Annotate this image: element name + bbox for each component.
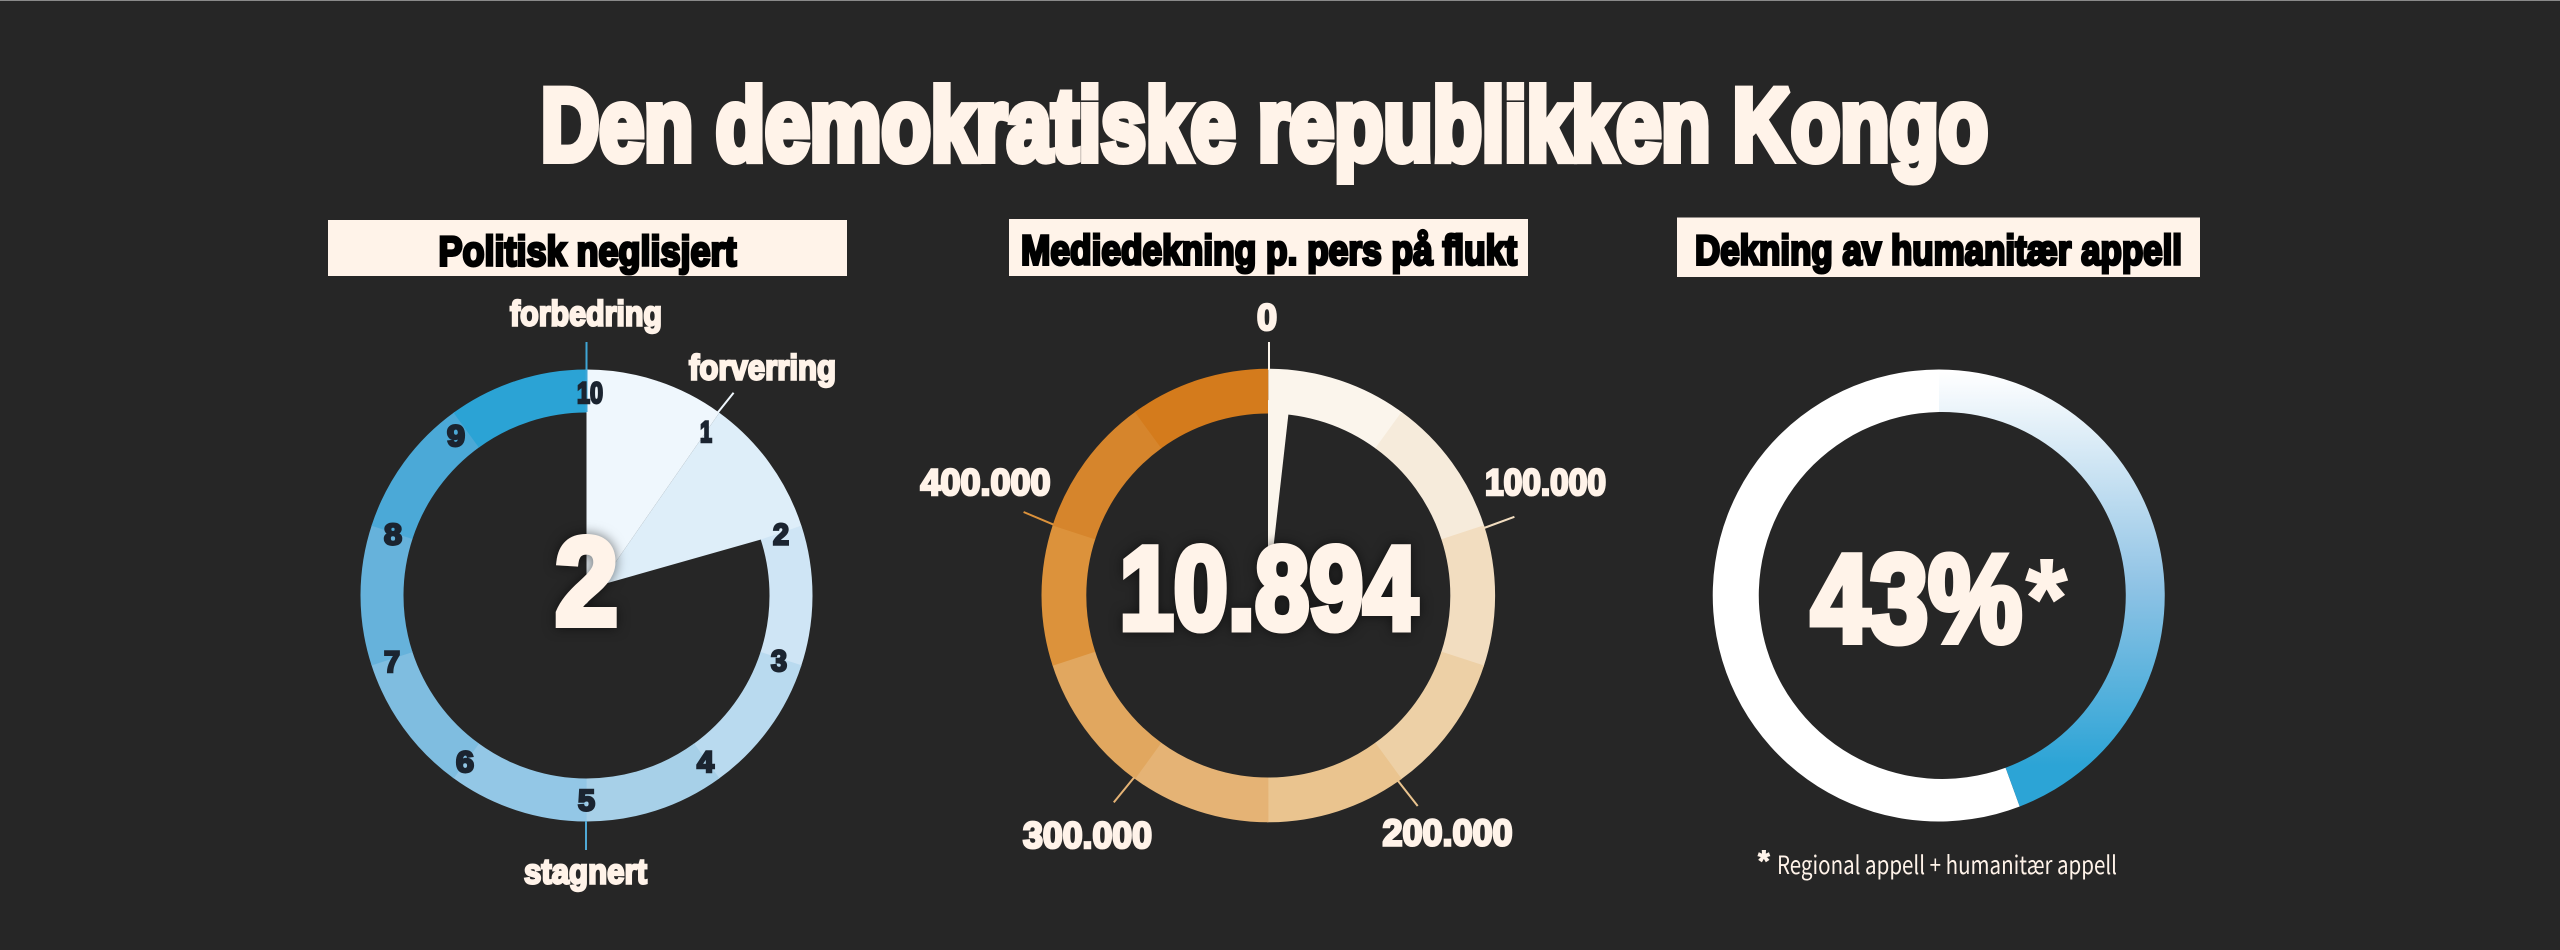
tick: 200.000 <box>1398 781 1418 806</box>
label: 300.000: 300.000 <box>1023 815 1152 856</box>
scale numbers: 10 <box>577 377 603 410</box>
scale numbers: 5 <box>578 784 595 818</box>
scale numbers <box>384 377 789 818</box>
heading: mediedekning: Mediedekning p. pers på flukt <box>1021 226 1517 274</box>
label: 0: 0 <box>1257 297 1277 338</box>
scale numbers: 7 <box>384 646 400 679</box>
tick: forverring <box>717 393 734 414</box>
scale numbers: 6 <box>456 746 474 779</box>
label: 400.000: 400.000 <box>920 462 1050 503</box>
label: forbedring: forbedring <box>510 294 662 334</box>
panel: mediedekning <box>920 219 1606 881</box>
scale numbers: 2 <box>773 518 789 552</box>
footnote: * <box>1758 845 1770 878</box>
heading: dekning av humanitaer appell <box>1677 218 2200 277</box>
scale numbers: 3 <box>771 645 787 678</box>
label: forverring: forverring <box>689 348 836 388</box>
tick: 400.000 <box>1024 512 1053 525</box>
needle wedge: value <box>1268 400 1289 560</box>
tick: 300.000 <box>1114 777 1134 802</box>
heading: politisk neglisjert: Politisk neglisjert <box>438 228 737 274</box>
heading: politisk neglisjert <box>328 220 847 276</box>
tick: 0 <box>1268 342 1270 370</box>
footnote: Regional appell + humanitær appell <box>1777 846 2117 882</box>
scale numbers: 8 <box>384 518 402 552</box>
gauge ring: 0 to 500.000 <box>983 310 1554 881</box>
donut arc: 43 percent covered <box>1939 370 2165 806</box>
big value: 43%: 43% <box>1811 530 2022 668</box>
tick: stagnert <box>585 821 587 850</box>
tick: forbedring <box>586 342 588 412</box>
scale numbers: 1 <box>700 416 712 449</box>
label: 100.000: 100.000 <box>1485 462 1606 503</box>
filled wedge: score 2 <box>586 370 801 604</box>
gauge ring: scale 1 to 10 <box>301 310 872 881</box>
panel: politisk neglisjert <box>301 220 872 892</box>
big value asterisk: * <box>2026 537 2067 660</box>
tick: 100.000 <box>1484 517 1514 528</box>
donut ring: uncovered part <box>1713 369 2020 821</box>
panel: dekning av humanitaer appell <box>1677 218 2200 882</box>
big value: 2: 2 <box>555 514 618 652</box>
heading: dekning av humanitaer appell: Dekning av humanitær appell <box>1695 226 2182 274</box>
big value: 10.894: 10.894 <box>1120 523 1418 655</box>
label: stagnert: stagnert <box>524 852 647 892</box>
title: Den demokratiske republikken Kongo <box>541 68 1988 182</box>
scale numbers: 4 <box>697 746 714 779</box>
scale numbers: 9 <box>447 420 465 453</box>
label: 200.000: 200.000 <box>1382 812 1512 854</box>
